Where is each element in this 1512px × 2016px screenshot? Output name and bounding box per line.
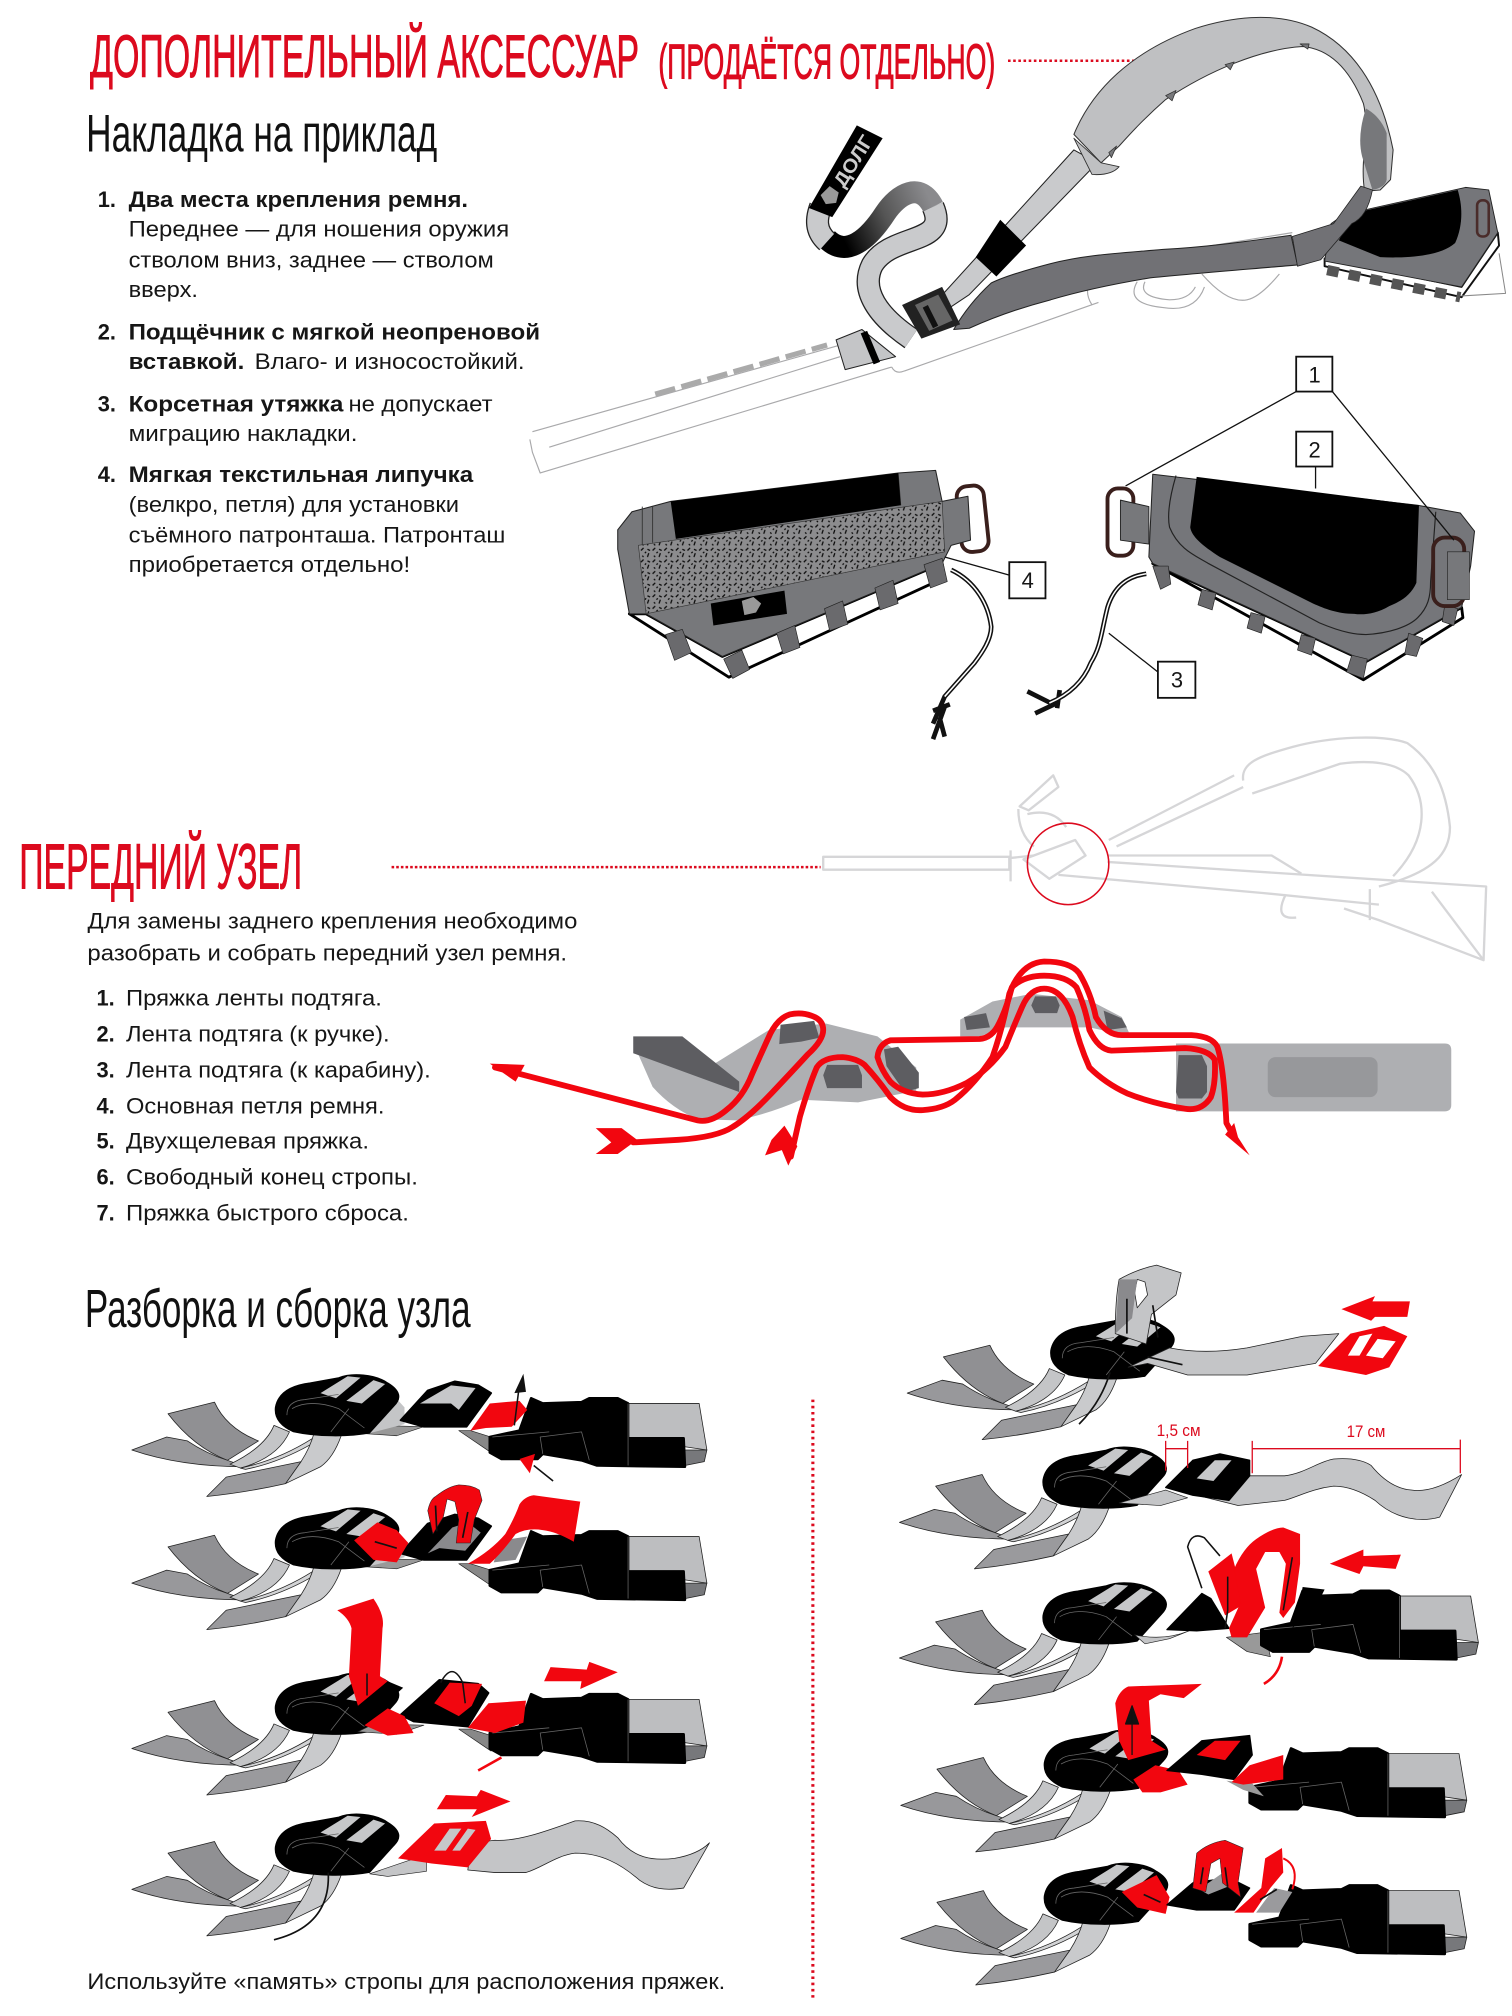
heading: disassembly: Разборка и сборка узла [85, 1279, 471, 1339]
logo tag [809, 125, 883, 217]
step R1 [907, 1265, 1410, 1440]
text list: stock cover features: Переднее — для ношения оружия [129, 217, 509, 242]
red threading lines [495, 961, 1234, 1157]
text list: stock cover features: 2. [98, 319, 116, 344]
dotted leader [392, 866, 821, 868]
text list: knot parts: Двухщелевая пряжка. [126, 1128, 369, 1153]
text: front knot intro: разобрать и собрать передний узел ремня. [87, 941, 567, 966]
text: front knot intro [87, 908, 577, 966]
text list: stock cover features: Влаго- и износостойкий. [255, 349, 525, 374]
text list: knot parts: Свободный конец стропы. [126, 1164, 418, 1189]
logo tag: ДОЛГ [829, 131, 878, 191]
heading: front knot: ПЕРЕДНИЙ УЗЕЛ [19, 830, 302, 903]
number callouts 1-4: 3 [1171, 668, 1183, 693]
shoulder pad [1074, 17, 1393, 191]
text list: knot parts: Основная петля ремня. [126, 1094, 384, 1119]
text list: stock cover features: Корсетная утяжка [129, 391, 344, 416]
text list: knot parts: 6. [96, 1164, 115, 1189]
main title: (ПРОДАЁТСЯ ОТДЕЛЬНО) [658, 35, 995, 89]
number callouts 1-4 [945, 357, 1454, 698]
strap buckles [976, 220, 1026, 277]
light strap [933, 150, 1097, 310]
step R3 [899, 1528, 1478, 1705]
vertical dotted divider [812, 1400, 814, 2000]
text list: knot parts: 4. [96, 1094, 115, 1119]
illustration: cover inner side [1027, 474, 1475, 713]
step L1 [132, 1374, 707, 1496]
threading diagram [490, 961, 1451, 1166]
webbing tabs [1153, 566, 1458, 678]
text list: stock cover features: не допускает [348, 391, 492, 416]
ghost gun with magnifier circle [823, 738, 1486, 960]
number callouts 1-4: 1 [1308, 363, 1321, 388]
text list: knot parts: Лента подтяга (к карабину). [126, 1058, 431, 1083]
heading: stock cover: Накладка на приклад [86, 105, 437, 164]
sling tail [868, 207, 936, 339]
measurement labels: 17 см [1347, 1422, 1385, 1441]
text list: stock cover features: Два места крепления ремня. [129, 187, 468, 212]
long dark strap [954, 235, 1297, 330]
text list: knot parts: 3. [96, 1058, 115, 1083]
text list: knot parts: 5. [96, 1128, 115, 1153]
text list: knot parts: Лента подтяга (к ручке). [126, 1022, 390, 1047]
number callouts 1-4: 2 [1308, 437, 1321, 462]
text list: knot parts: 1. [96, 986, 115, 1011]
step R4 [901, 1684, 1467, 1852]
text list: stock cover features: Подщёчник с мягкой неопреновой [129, 319, 540, 344]
text list: stock cover features: стволом вниз, заднее — стволом [129, 247, 494, 272]
text list: stock cover features: 3. [98, 391, 116, 416]
text: front knot intro: Для замены заднего крепления необходимо [87, 908, 577, 933]
step L3 [132, 1599, 707, 1795]
text list: knot parts: Пряжка ленты подтяга. [126, 986, 382, 1011]
text list: stock cover features [98, 187, 540, 577]
arrowheads [490, 1064, 1250, 1166]
measurement labels [1157, 1422, 1460, 1473]
loop strap to stock [1292, 186, 1372, 266]
step R2 with measurements [899, 1422, 1462, 1569]
text list: knot parts: 2. [96, 1022, 115, 1047]
text list: stock cover features: вставкой. [129, 349, 244, 374]
illustration: cover outer side [618, 470, 991, 739]
step L2 [132, 1485, 707, 1630]
webbing tabs [666, 558, 947, 678]
illustration: gun with sling and stock cover [530, 17, 1506, 473]
number callouts 1-4: 4 [1022, 568, 1034, 593]
dotted leader to sling [1008, 60, 1145, 62]
main title: ДОПОЛНИТЕЛЬНЫЙ АКСЕССУАР [90, 21, 639, 90]
text list: stock cover features: 1. [98, 187, 116, 212]
text list: stock cover features: съёмного патронташа. Патронташ [129, 523, 505, 548]
measurement labels: 1,5 см [1157, 1422, 1201, 1440]
text list: stock cover features: 4. [98, 462, 116, 487]
text list: knot parts: 7. [96, 1200, 115, 1225]
footer note: Используйте «память» стропы для расположения пряжек. [87, 1969, 725, 1994]
text list: knot parts [96, 986, 431, 1225]
text list: stock cover features: миграцию накладки. [129, 421, 357, 446]
text list: stock cover features: Мягкая текстильная липучка [129, 462, 474, 487]
cord [933, 570, 991, 739]
step R5 [901, 1840, 1467, 1985]
pad loops [1109, 44, 1309, 158]
text list: stock cover features: (велкро, петля) для установки [129, 492, 459, 517]
text list: knot parts: Пряжка быстрого сброса. [126, 1200, 409, 1225]
text list: stock cover features: приобретается отдельно! [129, 552, 410, 577]
step L4 [132, 1790, 709, 1940]
stock cover on gun [1325, 187, 1506, 297]
text list: stock cover features: вверх. [129, 277, 198, 302]
